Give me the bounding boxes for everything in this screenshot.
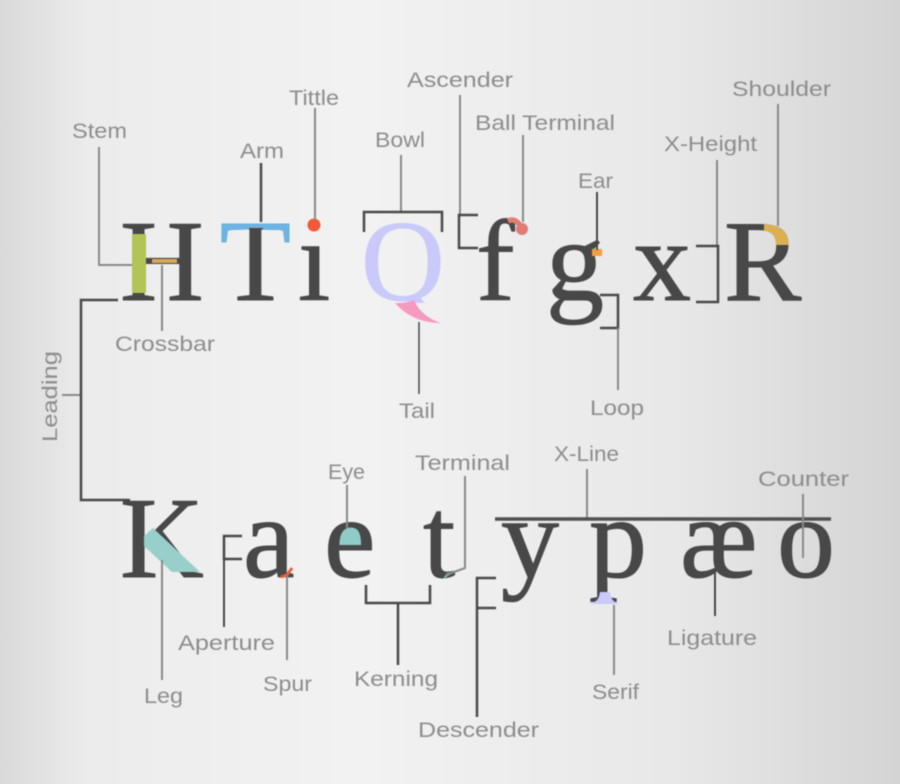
label: Stem bbox=[72, 120, 132, 265]
label: Arm: Arm bbox=[240, 140, 284, 163]
label: Bowl bbox=[364, 129, 442, 232]
letter H with stem and crossbar: H bbox=[120, 198, 204, 326]
letter Q with bowl and tail: Q bbox=[361, 198, 445, 326]
label: Aperture: Aperture bbox=[178, 632, 275, 655]
letter e with eye: e bbox=[324, 475, 376, 603]
letter y: y bbox=[501, 475, 559, 603]
label: Arm bbox=[240, 140, 284, 222]
label: Crossbar bbox=[115, 265, 215, 356]
label: X-Line: X-Line bbox=[554, 443, 619, 466]
label: Serif bbox=[592, 605, 639, 704]
label: Terminal bbox=[415, 452, 510, 575]
label: Ball Terminal: Ball Terminal bbox=[475, 112, 615, 135]
label: Descender: Descender bbox=[418, 719, 539, 742]
label: Leading: Leading bbox=[39, 351, 62, 442]
label: Loop: Loop bbox=[590, 397, 644, 420]
letter row two bbox=[120, 475, 835, 604]
label: Ligature: Ligature bbox=[667, 627, 757, 650]
letter T with arm bbox=[220, 222, 290, 302]
label: Counter bbox=[758, 468, 849, 558]
label: Counter: Counter bbox=[758, 468, 849, 491]
label: Ascender bbox=[407, 69, 513, 248]
label: Descender bbox=[418, 578, 539, 742]
label: Tittle bbox=[289, 87, 339, 220]
label: Tail bbox=[399, 322, 435, 423]
letter T with arm: T bbox=[220, 198, 291, 326]
label: Aperture bbox=[178, 536, 275, 655]
label: Leg: Leg bbox=[144, 685, 183, 708]
label: Ascender: Ascender bbox=[407, 69, 513, 92]
label: Spur bbox=[263, 576, 312, 696]
letter o: o bbox=[777, 475, 835, 603]
label: Ligature bbox=[667, 572, 757, 650]
letter g with ear: g bbox=[546, 198, 604, 326]
letter f with ball terminal: f bbox=[476, 198, 515, 326]
label: Leading bbox=[39, 300, 130, 500]
label: Spur: Spur bbox=[263, 673, 312, 696]
label: Serif: Serif bbox=[592, 681, 639, 704]
label: Ear bbox=[578, 170, 613, 250]
letter R with shoulder: R bbox=[724, 198, 802, 326]
label: Ear: Ear bbox=[578, 170, 613, 193]
label: Bowl: Bowl bbox=[375, 129, 425, 152]
label: Tittle: Tittle bbox=[289, 87, 339, 110]
label: Stem: Stem bbox=[72, 120, 127, 143]
label: Kerning bbox=[354, 585, 438, 691]
ligature ae: æ bbox=[680, 475, 757, 603]
label: Kerning: Kerning bbox=[354, 668, 438, 691]
letter i with tittle bbox=[299, 218, 330, 301]
label: Eye bbox=[328, 461, 365, 528]
label: Eye: Eye bbox=[328, 461, 365, 484]
letter T with arm: T bbox=[220, 198, 291, 326]
letter x: x bbox=[633, 198, 691, 326]
letter row one bbox=[122, 216, 802, 326]
letter R with shoulder: R bbox=[724, 198, 802, 326]
letter t with terminal: t bbox=[423, 475, 455, 603]
letter K with leg: K bbox=[120, 475, 204, 603]
label: Crossbar: Crossbar bbox=[115, 333, 215, 356]
label: Terminal: Terminal bbox=[415, 452, 510, 475]
letter a with spur: a bbox=[243, 475, 294, 603]
label: Loop bbox=[590, 295, 644, 420]
letter R with shoulder bbox=[726, 223, 802, 302]
label: Tail: Tail bbox=[399, 400, 435, 423]
label: Shoulder: Shoulder bbox=[732, 78, 831, 101]
label: X-Height: X-Height bbox=[664, 133, 757, 156]
letter p with serif: p bbox=[589, 475, 647, 603]
label: Ball Terminal bbox=[475, 112, 615, 222]
label: X-Height bbox=[664, 133, 757, 302]
letter i with tittle: i bbox=[298, 198, 330, 326]
